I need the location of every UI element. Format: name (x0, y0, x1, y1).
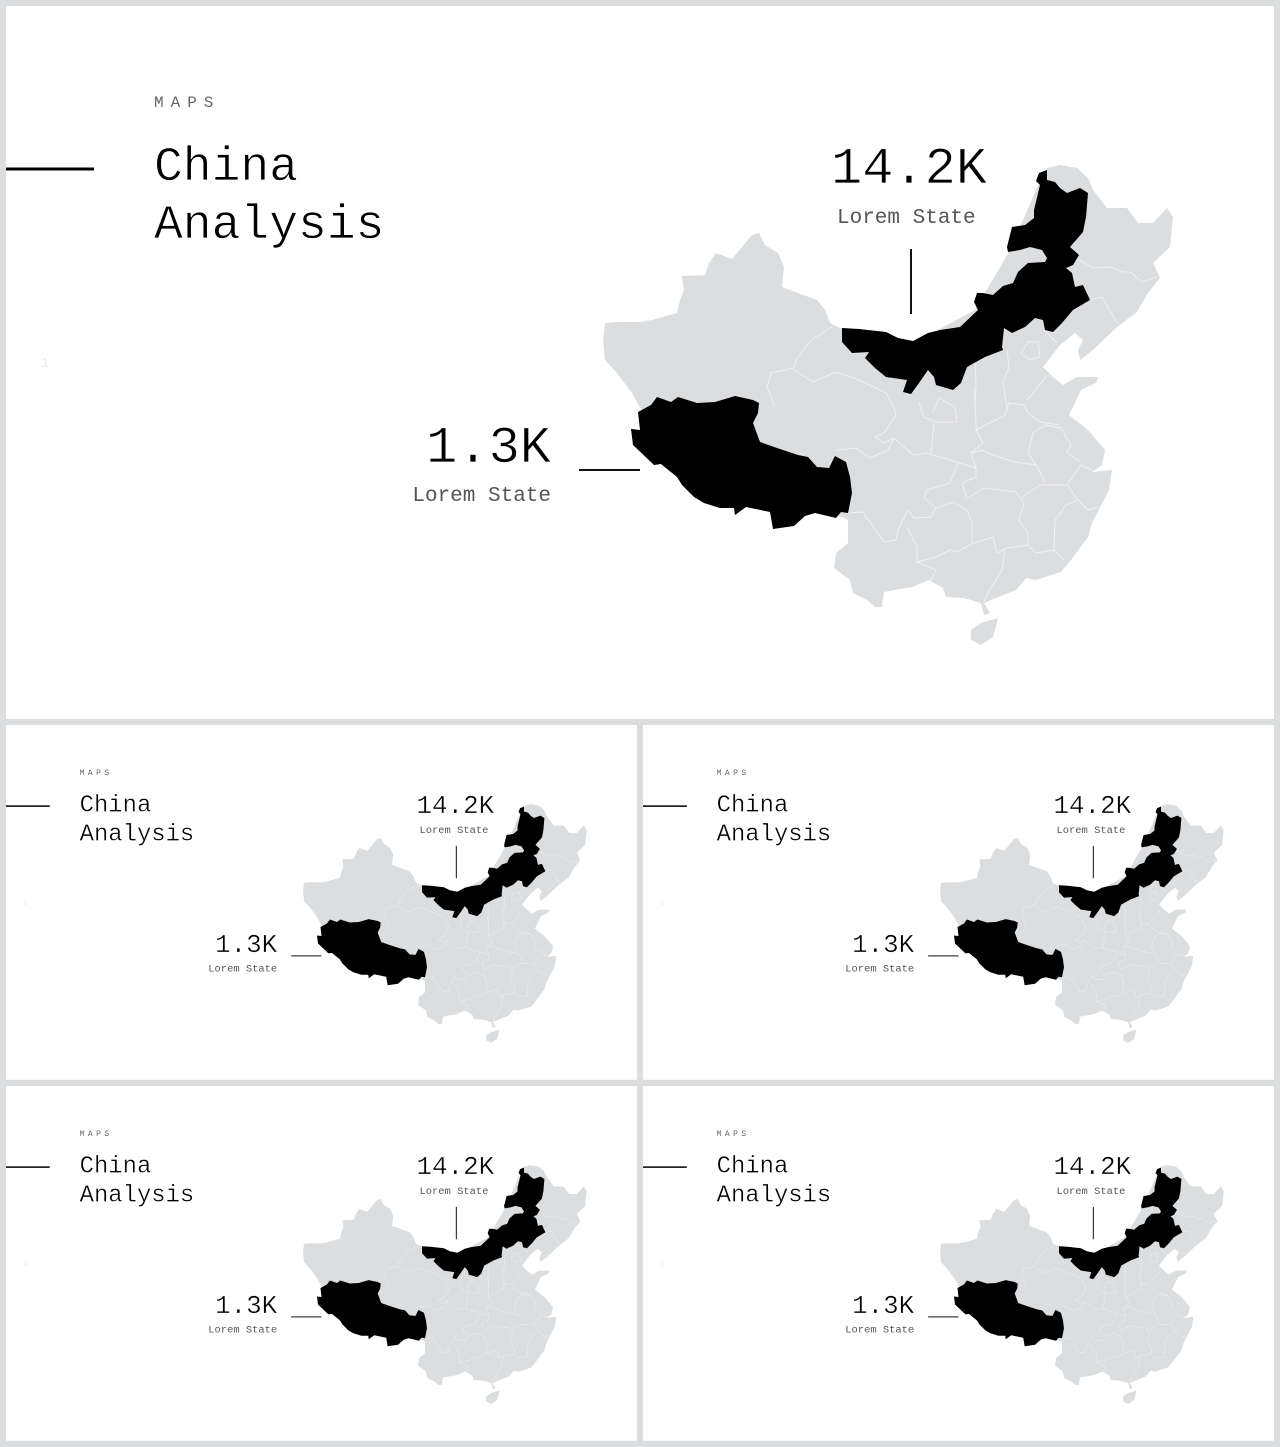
connector line (455, 1207, 458, 1239)
connector line (1092, 1207, 1095, 1239)
stat: 14.2K: 14.2K (1054, 1152, 1132, 1182)
stat: 14.2K: 14.2K (831, 140, 988, 199)
eyebrow label: MAPS (80, 769, 113, 778)
slide number: 3 (23, 1261, 27, 1269)
stat label: Lorem State (208, 963, 277, 975)
connector line (291, 1315, 321, 1318)
accent line (643, 805, 687, 807)
title: China (80, 793, 151, 820)
slide number: 1 (660, 1261, 664, 1269)
map of China (940, 804, 1224, 1043)
connector line (455, 846, 458, 878)
map of China (303, 1165, 587, 1404)
connector line (1092, 846, 1095, 878)
connector line (910, 249, 912, 314)
stat label: Lorem State (1057, 825, 1125, 837)
stat label: Lorem State (1057, 1186, 1125, 1198)
title second line: Analysis (80, 1182, 194, 1209)
eyebrow label: MAPS (154, 94, 220, 112)
title: China (80, 1154, 151, 1181)
stat: 14.2K: 14.2K (1054, 791, 1132, 821)
title second line: Analysis (154, 199, 384, 253)
title second line: Analysis (717, 821, 831, 848)
eyebrow label: MAPS (717, 769, 750, 778)
accent line (643, 1166, 687, 1168)
connector line (291, 954, 321, 957)
stat label: Lorem State (420, 825, 488, 837)
slide number: 1 (41, 356, 49, 372)
stat: 1.3K: 1.3K (215, 1291, 278, 1321)
stat label: Lorem State (420, 1186, 488, 1198)
stat: 1.3K: 1.3K (852, 930, 915, 960)
title: China (717, 1154, 788, 1181)
stat: 1.3K: 1.3K (215, 930, 278, 960)
panel: slide 5 (643, 1086, 1274, 1441)
stat: 1.3K: 1.3K (426, 419, 552, 478)
title: China (717, 793, 788, 820)
panel: main slide (6, 6, 1274, 719)
connector line (928, 954, 958, 957)
connector line (579, 469, 640, 471)
panel: slide 3 (643, 725, 1274, 1080)
map of China (940, 1165, 1224, 1404)
accent line (6, 1166, 50, 1168)
title second line: Analysis (717, 1182, 831, 1209)
accent line (6, 168, 94, 170)
eyebrow label: MAPS (80, 1130, 113, 1139)
title second line: Analysis (80, 821, 194, 848)
stat: 1.3K: 1.3K (852, 1291, 915, 1321)
title: China (154, 141, 298, 195)
slide number: 2 (23, 900, 27, 908)
eyebrow label: MAPS (717, 1130, 750, 1139)
stat label: Lorem State (412, 485, 551, 508)
stat label: Lorem State (837, 207, 976, 230)
stat label: Lorem State (845, 963, 914, 975)
stat: 14.2K: 14.2K (417, 791, 495, 821)
map of China (303, 804, 587, 1043)
connector line (928, 1315, 958, 1318)
stat: 14.2K: 14.2K (417, 1152, 495, 1182)
panel: slide 2 (6, 725, 637, 1080)
stat label: Lorem State (208, 1324, 277, 1336)
map of China (603, 165, 1173, 645)
slide number: 1 (660, 900, 664, 908)
panel: slide 4 (6, 1086, 637, 1441)
accent line (6, 805, 50, 807)
stat label: Lorem State (845, 1324, 914, 1336)
